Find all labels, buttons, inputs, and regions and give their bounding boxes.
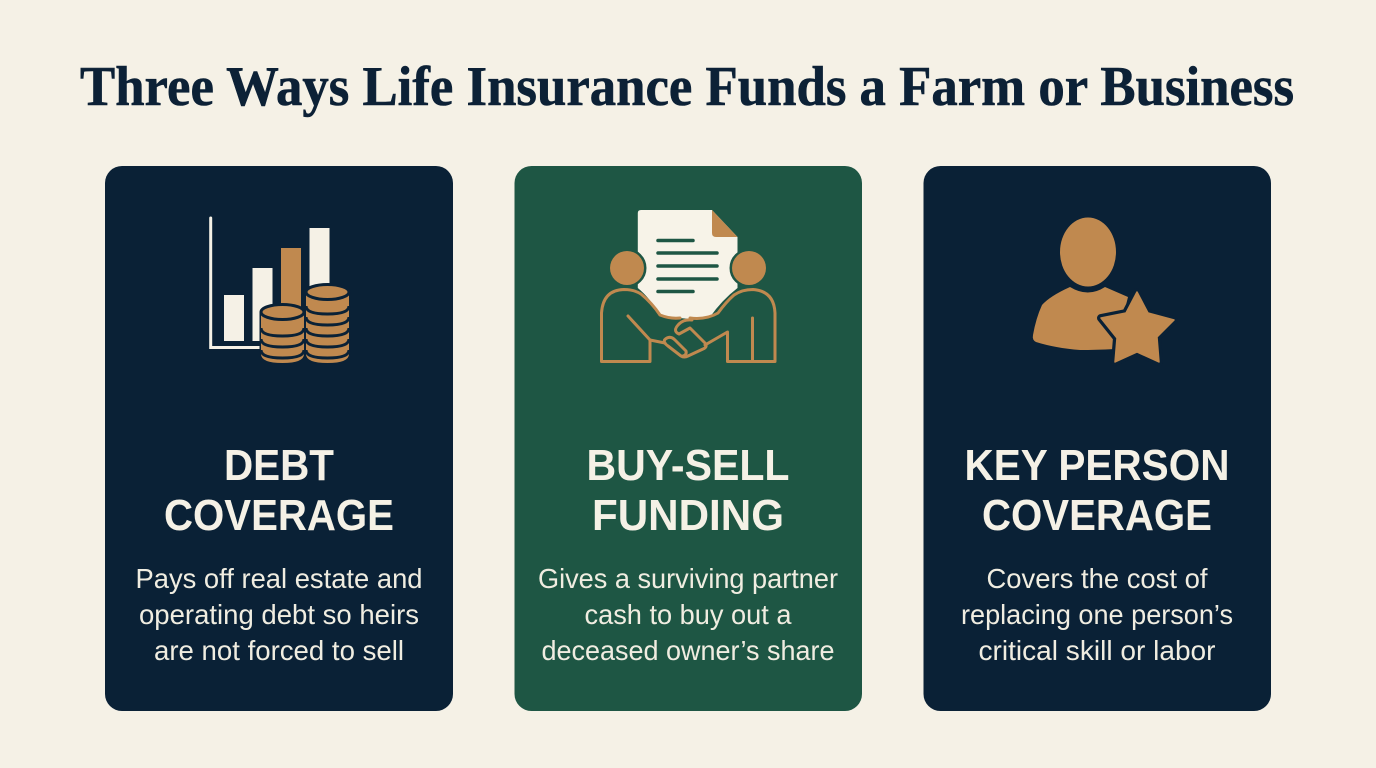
text: key person coverage description: critical skill or labor	[978, 635, 1216, 666]
heading: debt coverage: COVERAGE	[164, 491, 394, 540]
icon: contract and handshake	[602, 210, 775, 362]
text: buy-sell funding description: cash to buy out a	[584, 599, 792, 630]
coin stack left	[260, 304, 306, 365]
text: debt coverage description: Pays off real estate and	[136, 563, 422, 594]
icon: person with star	[1033, 218, 1174, 362]
panel: debt coverage	[105, 166, 453, 711]
text: buy-sell funding description: Gives a surviving partner	[538, 563, 838, 594]
heading: buy-sell funding: FUNDING	[592, 491, 784, 540]
text: key person coverage description: replacing one person’s	[961, 599, 1233, 630]
panel: key person coverage	[924, 166, 1271, 711]
icon: bar chart and coins	[211, 218, 350, 365]
text: debt coverage description: operating debt so heirs	[139, 599, 419, 630]
heading: key person coverage: KEY PERSON	[964, 441, 1230, 490]
text: debt coverage description: are not forced to sell	[154, 635, 404, 666]
heading: buy-sell funding: BUY-SELL	[586, 441, 790, 490]
text: key person coverage description: Covers the cost of	[986, 563, 1208, 594]
title: Three Ways Life Insurance Funds a Farm or Business	[80, 56, 1294, 118]
text: buy-sell funding description: deceased owner’s share	[542, 635, 834, 666]
heading: debt coverage: DEBT	[224, 441, 334, 490]
panel: buy-sell funding	[514, 166, 862, 711]
coin stack right	[304, 284, 350, 365]
heading: key person coverage: COVERAGE	[982, 491, 1212, 540]
